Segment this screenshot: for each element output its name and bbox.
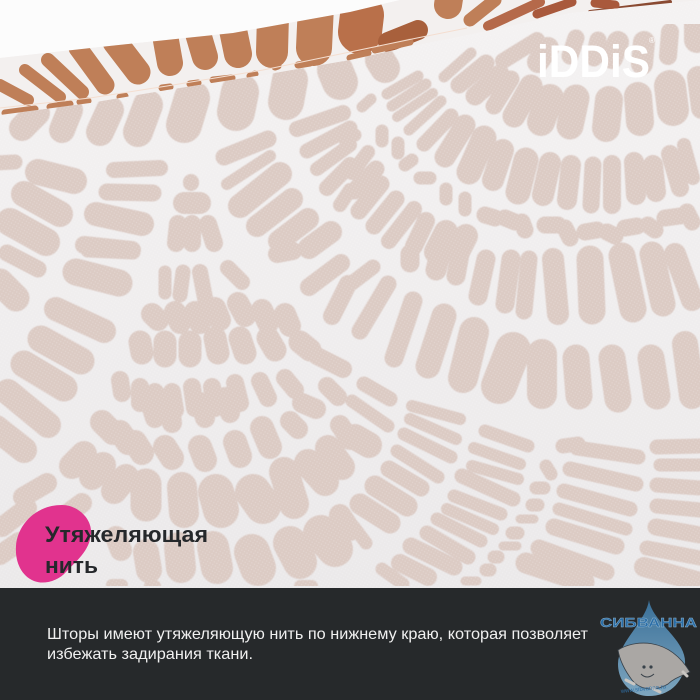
heading: weighted thread bbox=[45, 522, 208, 578]
text: description: избежать задирания ткани. bbox=[47, 646, 253, 663]
panel: white background above hem bbox=[0, 0, 400, 58]
logo: Sibvanna watermark bbox=[600, 600, 698, 696]
icon: water drop bbox=[618, 600, 685, 696]
hem: stitch line bbox=[0, 28, 467, 108]
text: description bbox=[47, 626, 589, 663]
text: description: Шторы имеют утяжеляющую нить по нижнему краю, которая позволяет bbox=[47, 626, 589, 643]
icon: bathtub face bbox=[641, 665, 654, 677]
heading: weighted thread: нить bbox=[45, 553, 98, 578]
logo: iDDiS: iDDiS bbox=[537, 36, 650, 87]
hem: copper stripes bbox=[0, 0, 670, 113]
heading: weighted thread: Утяжеляющая bbox=[45, 522, 208, 547]
icon: bathtub legs bbox=[626, 672, 687, 692]
logo: registered mark: ® bbox=[649, 36, 655, 45]
panel: dark footer bbox=[0, 588, 700, 700]
panel: curtain hem band bbox=[0, 0, 700, 115]
text: site address: www.sibvanna.ru bbox=[620, 684, 666, 695]
icon: bathtub bbox=[618, 643, 690, 689]
icon: pink blob bbox=[16, 505, 91, 583]
text: brand name: СИБВАННА bbox=[600, 615, 698, 630]
